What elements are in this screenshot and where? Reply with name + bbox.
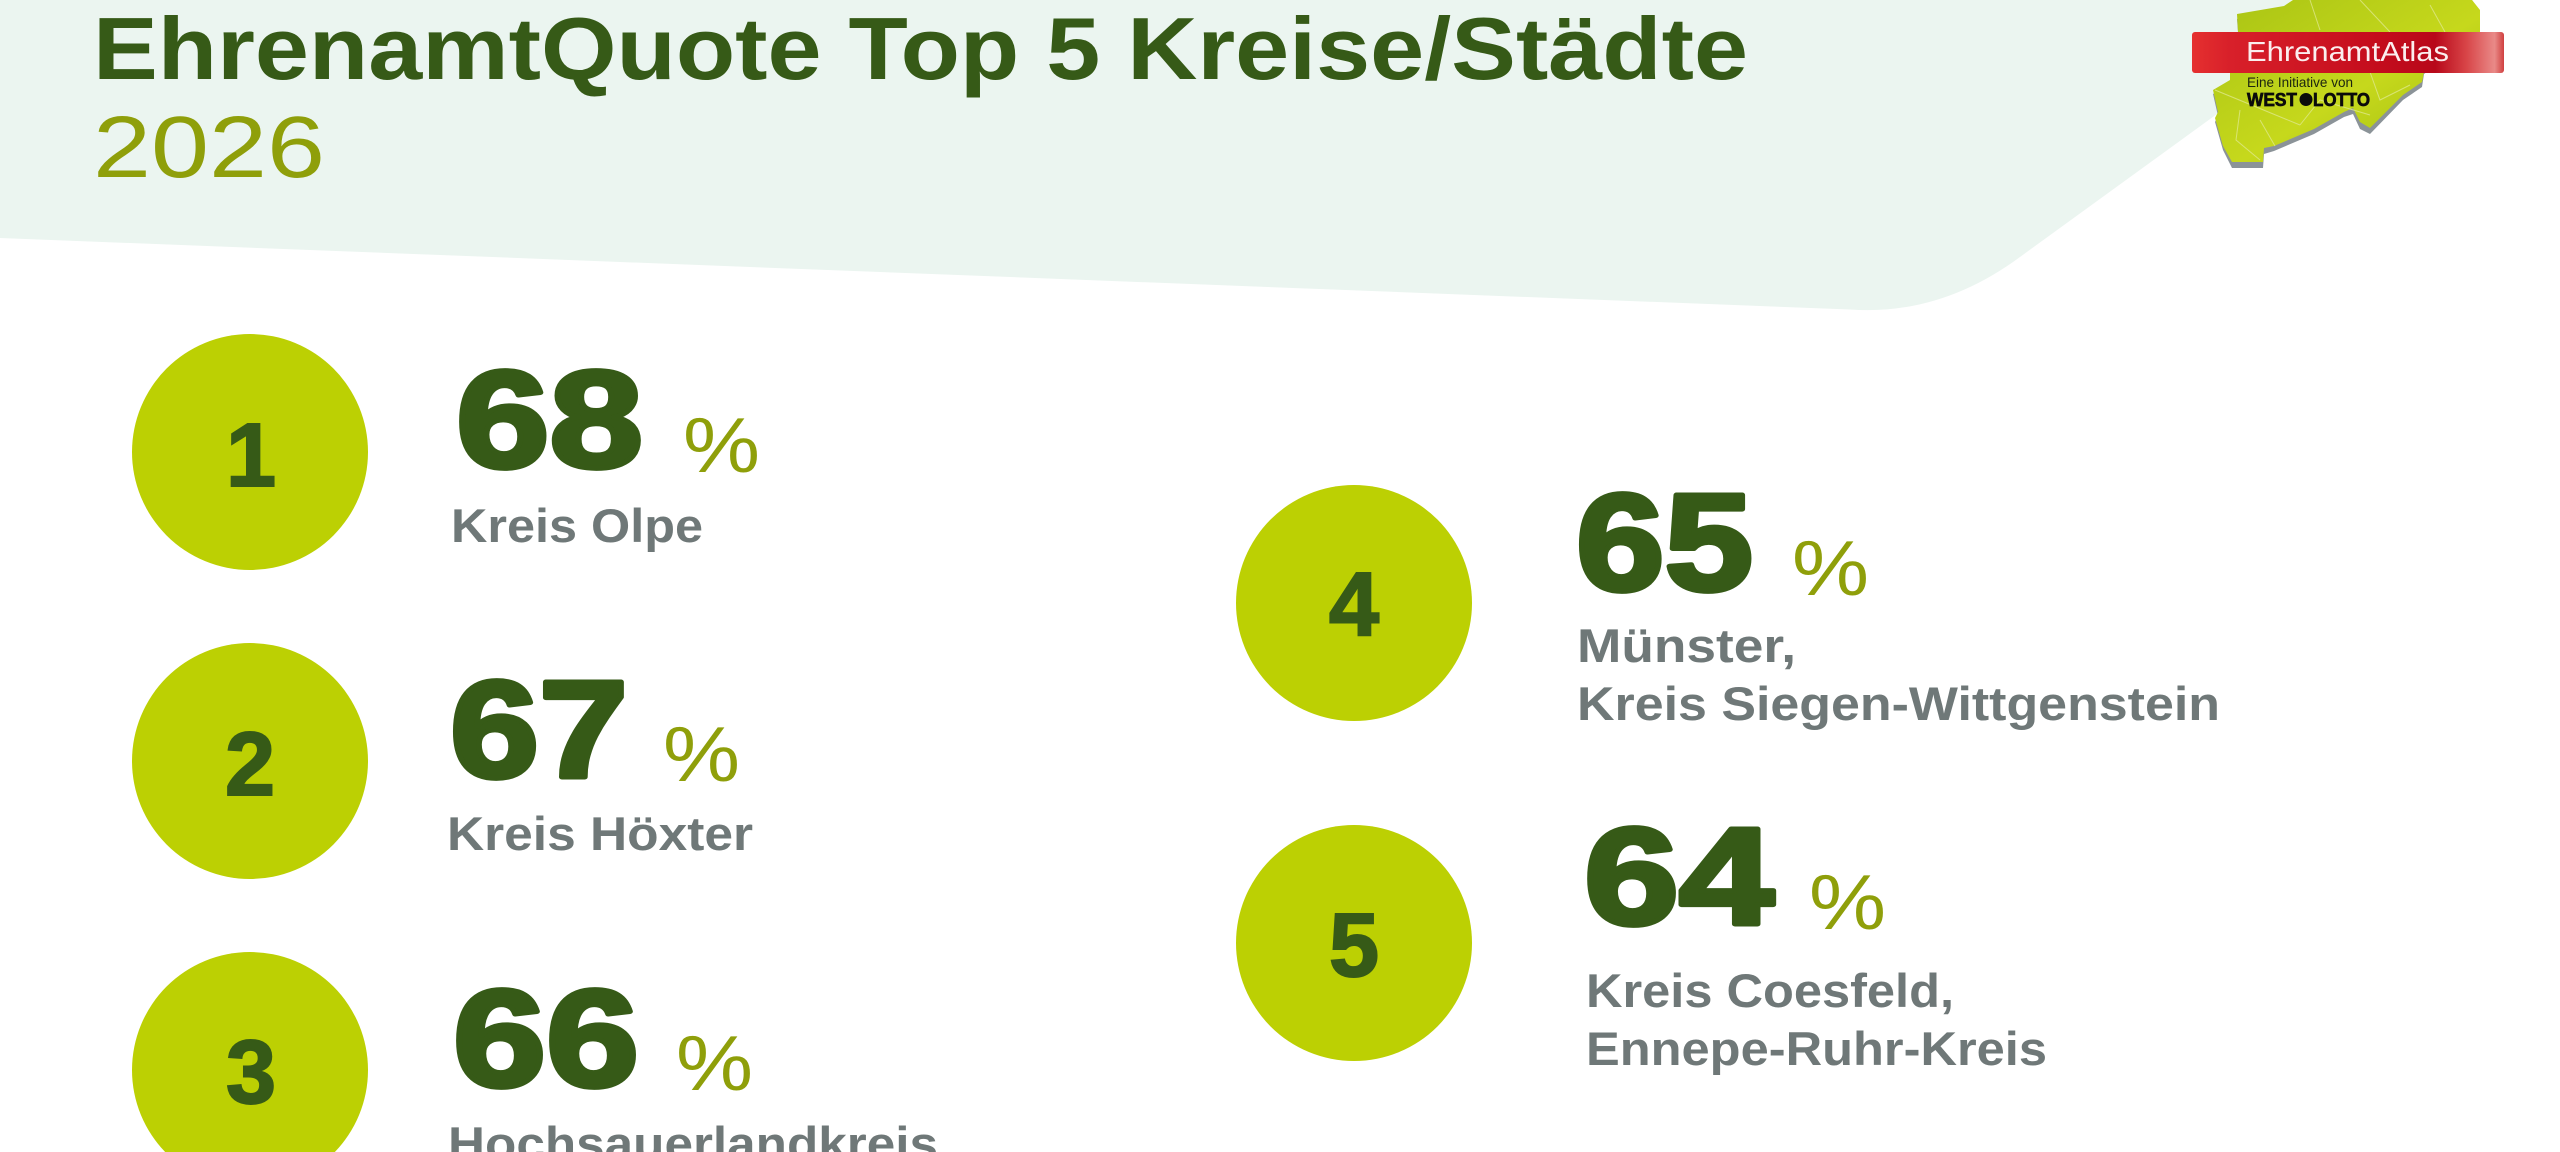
- rank number 3: 3: [226, 1023, 276, 1123]
- map district lines: [2215, 0, 2445, 160]
- value 67: 67: [450, 653, 628, 807]
- logo wordmark: EhrenamtAtlas: [2246, 36, 2449, 67]
- logo: WestLotto: WEST: [2247, 90, 2297, 110]
- name line 2: Ennepe-Ruhr-Kreis: [1586, 1022, 2047, 1075]
- red ribbon: [2192, 32, 2504, 73]
- logo tagline: Eine Initiative von: [2247, 74, 2353, 90]
- icon: map of NRW: [2213, 0, 2480, 162]
- heading: [93, 0, 1748, 196]
- rank circle 5: [1236, 825, 1472, 1061]
- title: EhrenamtQuote Top 5 Kreise/Städte: [93, 0, 1748, 98]
- value 66: 66: [453, 962, 639, 1116]
- logo: EhrenamtAtlas: [2192, 0, 2504, 168]
- entry 2: [132, 643, 753, 879]
- percent sign: %: [683, 401, 760, 489]
- entry 4: [1236, 466, 2220, 730]
- name line 1: Kreis Coesfeld,: [1586, 964, 1954, 1017]
- name: Kreis Höxter: [447, 807, 753, 860]
- rank number 4: 4: [1329, 555, 1379, 655]
- value 64: 64: [1584, 800, 1774, 954]
- entry 1: [132, 334, 760, 570]
- value 68: 68: [456, 343, 643, 497]
- rank number 5: 5: [1329, 896, 1379, 996]
- rank circle 4: [1236, 485, 1472, 721]
- icon: map of NRW shadow: [2213, 0, 2480, 168]
- name line 2: Kreis Siegen-Wittgenstein: [1577, 677, 2220, 730]
- entry 5: [1236, 800, 2047, 1075]
- entry 3: [132, 952, 938, 1152]
- percent sign: %: [1792, 524, 1869, 612]
- year: 2026: [93, 99, 325, 196]
- logo: WestLotto: LOTTO: [2313, 90, 2370, 110]
- value 65: 65: [1576, 466, 1753, 620]
- rank circle 2: [132, 643, 368, 879]
- percent sign: %: [676, 1019, 753, 1107]
- header background panel: [0, 0, 2374, 310]
- percent sign: %: [663, 710, 740, 798]
- rank circle 1: [132, 334, 368, 570]
- rank circle 3: [132, 952, 368, 1152]
- rank number 1: 1: [226, 406, 276, 506]
- name: Kreis Olpe: [451, 499, 703, 552]
- logo: WestLotto: [2247, 90, 2370, 110]
- percent sign: %: [1809, 858, 1886, 946]
- rank number 2: 2: [225, 715, 275, 815]
- name line 1: Münster,: [1577, 619, 1796, 672]
